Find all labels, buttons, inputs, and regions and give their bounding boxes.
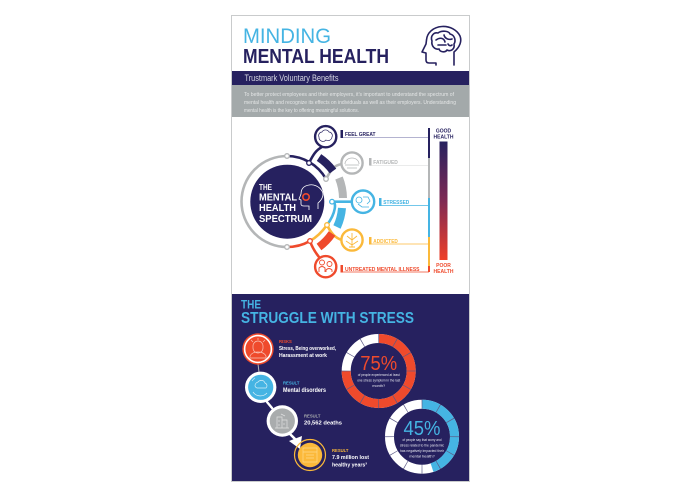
band: Trustmark Voluntary Benefits <box>232 71 469 85</box>
donut chart: 45%: 45% <box>404 418 441 440</box>
junction nodes <box>285 154 334 249</box>
step: lost healthy years: RESULT <box>332 448 349 453</box>
heading: STRUGGLE WITH STRESS <box>241 310 414 327</box>
panel: struggle with stress <box>232 294 469 481</box>
gradient health scale <box>434 128 454 275</box>
band: Trustmark Voluntary Benefits: Trustmark Voluntary Benefits <box>244 73 339 83</box>
intro text block: To better protect employees and their employers, it's important to understand the spectrum of <box>244 92 454 98</box>
label: addicted: ADDICTED <box>373 239 398 245</box>
step: mental disorders: RESULT <box>283 380 300 386</box>
label: untreated mental illness <box>340 265 429 273</box>
step: deaths <box>267 405 342 437</box>
step: mental disorders: Mental disorders <box>283 387 326 394</box>
label: fatigued <box>369 158 429 166</box>
label: addicted <box>369 237 429 245</box>
step: lost healthy years <box>294 440 369 470</box>
gradient health scale: POOR <box>436 263 451 269</box>
title: MINDING <box>243 25 331 48</box>
step: deaths: RESULT <box>304 414 321 418</box>
step: risks <box>242 333 336 365</box>
label: feel great: FEEL GREAT <box>345 132 376 138</box>
thick arc segments <box>319 158 343 247</box>
arrow: result to result <box>289 436 302 449</box>
heading <box>241 299 414 327</box>
donut chart: 75% <box>346 338 411 404</box>
donut chart: 45%: of people say that worry and <box>402 437 442 442</box>
center circle: the mental health spectrum: HEALTH <box>259 202 296 214</box>
icon node: fatigued <box>341 152 363 174</box>
center circle: the mental health spectrum: THE <box>259 183 273 192</box>
donut chart: 75%: month? <box>372 383 386 388</box>
step: lost healthy years: healthy years³ <box>332 462 367 468</box>
flow connectors <box>258 364 297 441</box>
center circle: the mental health spectrum <box>250 165 324 239</box>
donut chart: 45%: stress related to the pandemic <box>400 442 444 448</box>
step: lost healthy years: 7.9 million lost <box>332 455 369 461</box>
donut chart: 45%: mental health? <box>409 454 436 458</box>
center circle: the mental health spectrum: MENTAL <box>259 192 298 204</box>
icon node: feel great <box>315 126 336 147</box>
step: mental disorders <box>245 372 326 403</box>
step: risks: Stress, Being overworked, <box>279 346 336 352</box>
donut chart: 75%: of people experienced at least <box>358 372 400 377</box>
heading: THE <box>241 299 261 311</box>
chart: mental health spectrum <box>242 126 429 277</box>
donut chart: 45% <box>390 404 454 469</box>
donut chart: 45%: has negatively impacted their <box>400 448 445 453</box>
ring and connectors <box>242 147 353 257</box>
donut chart: 75%: one stress symptom in the last <box>357 378 401 382</box>
segmented vertical bar <box>428 128 430 272</box>
step: risks: RISKS <box>279 339 292 344</box>
gradient health scale: HEALTH <box>434 134 454 140</box>
label: untreated mental illness: UNTREATED MENTAL ILLNESS <box>345 267 420 273</box>
gradient health scale: HEALTH <box>434 269 454 275</box>
intro text block: mental health is the key to offering meaningful solutions. <box>244 108 359 114</box>
title: MENTAL HEALTH <box>243 46 389 68</box>
donut chart: 75%: 75% <box>360 353 397 375</box>
icon: head with brain <box>422 26 461 65</box>
step: risks: Harassment at work <box>279 353 327 359</box>
gradient health scale: GOOD <box>436 128 452 134</box>
icon node: addicted <box>341 229 363 251</box>
icon node: stressed <box>352 190 374 213</box>
label: stressed <box>379 198 429 206</box>
label: feel great <box>340 130 429 138</box>
center circle: the mental health spectrum: SPECTRUM <box>259 213 312 225</box>
intro text block: mental health and recognize its effects on individuals as well as their employers. Understanding <box>244 100 456 106</box>
step: deaths: 20,562 deaths <box>304 421 342 427</box>
label: stressed: STRESSED <box>383 200 409 206</box>
label: fatigued: FATIGUED <box>373 160 398 166</box>
intro text block <box>232 85 469 117</box>
icon node: untreated mental illness <box>315 256 336 277</box>
title <box>243 25 389 68</box>
